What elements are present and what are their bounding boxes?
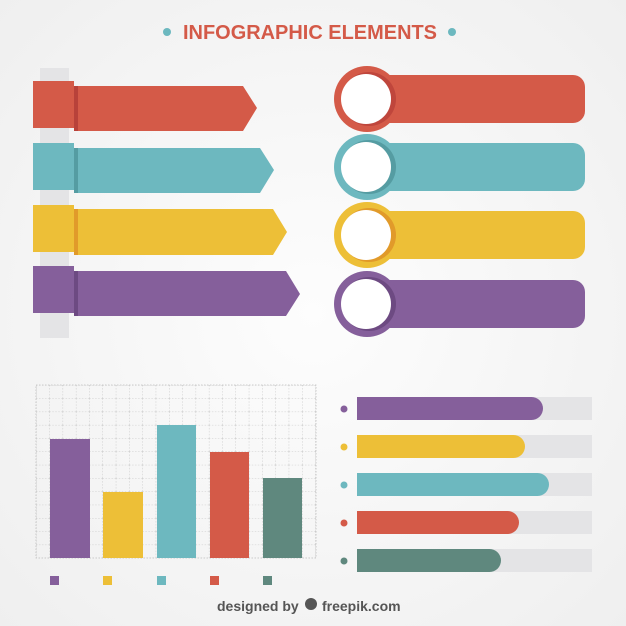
panel: circle banners: [334, 66, 585, 337]
progress bars: [340, 397, 592, 572]
banner: teal: [334, 134, 585, 200]
panel: arrow ribbons: [33, 68, 300, 338]
ribbon: purple: [33, 266, 300, 316]
banner: red: [334, 66, 585, 132]
footer credit: [217, 598, 401, 614]
ribbon: teal: [33, 143, 274, 193]
legend: [50, 576, 272, 585]
ribbon: red: [33, 81, 257, 131]
bar chart: [36, 385, 316, 585]
banner: purple: [334, 271, 585, 337]
ribbon: yellow: [33, 205, 287, 255]
footer credit: freepik.com: [322, 598, 401, 614]
banner: yellow: [334, 202, 585, 268]
footer credit: designed by: [217, 598, 299, 614]
title: INFOGRAPHIC ELEMENTS: [183, 22, 437, 44]
